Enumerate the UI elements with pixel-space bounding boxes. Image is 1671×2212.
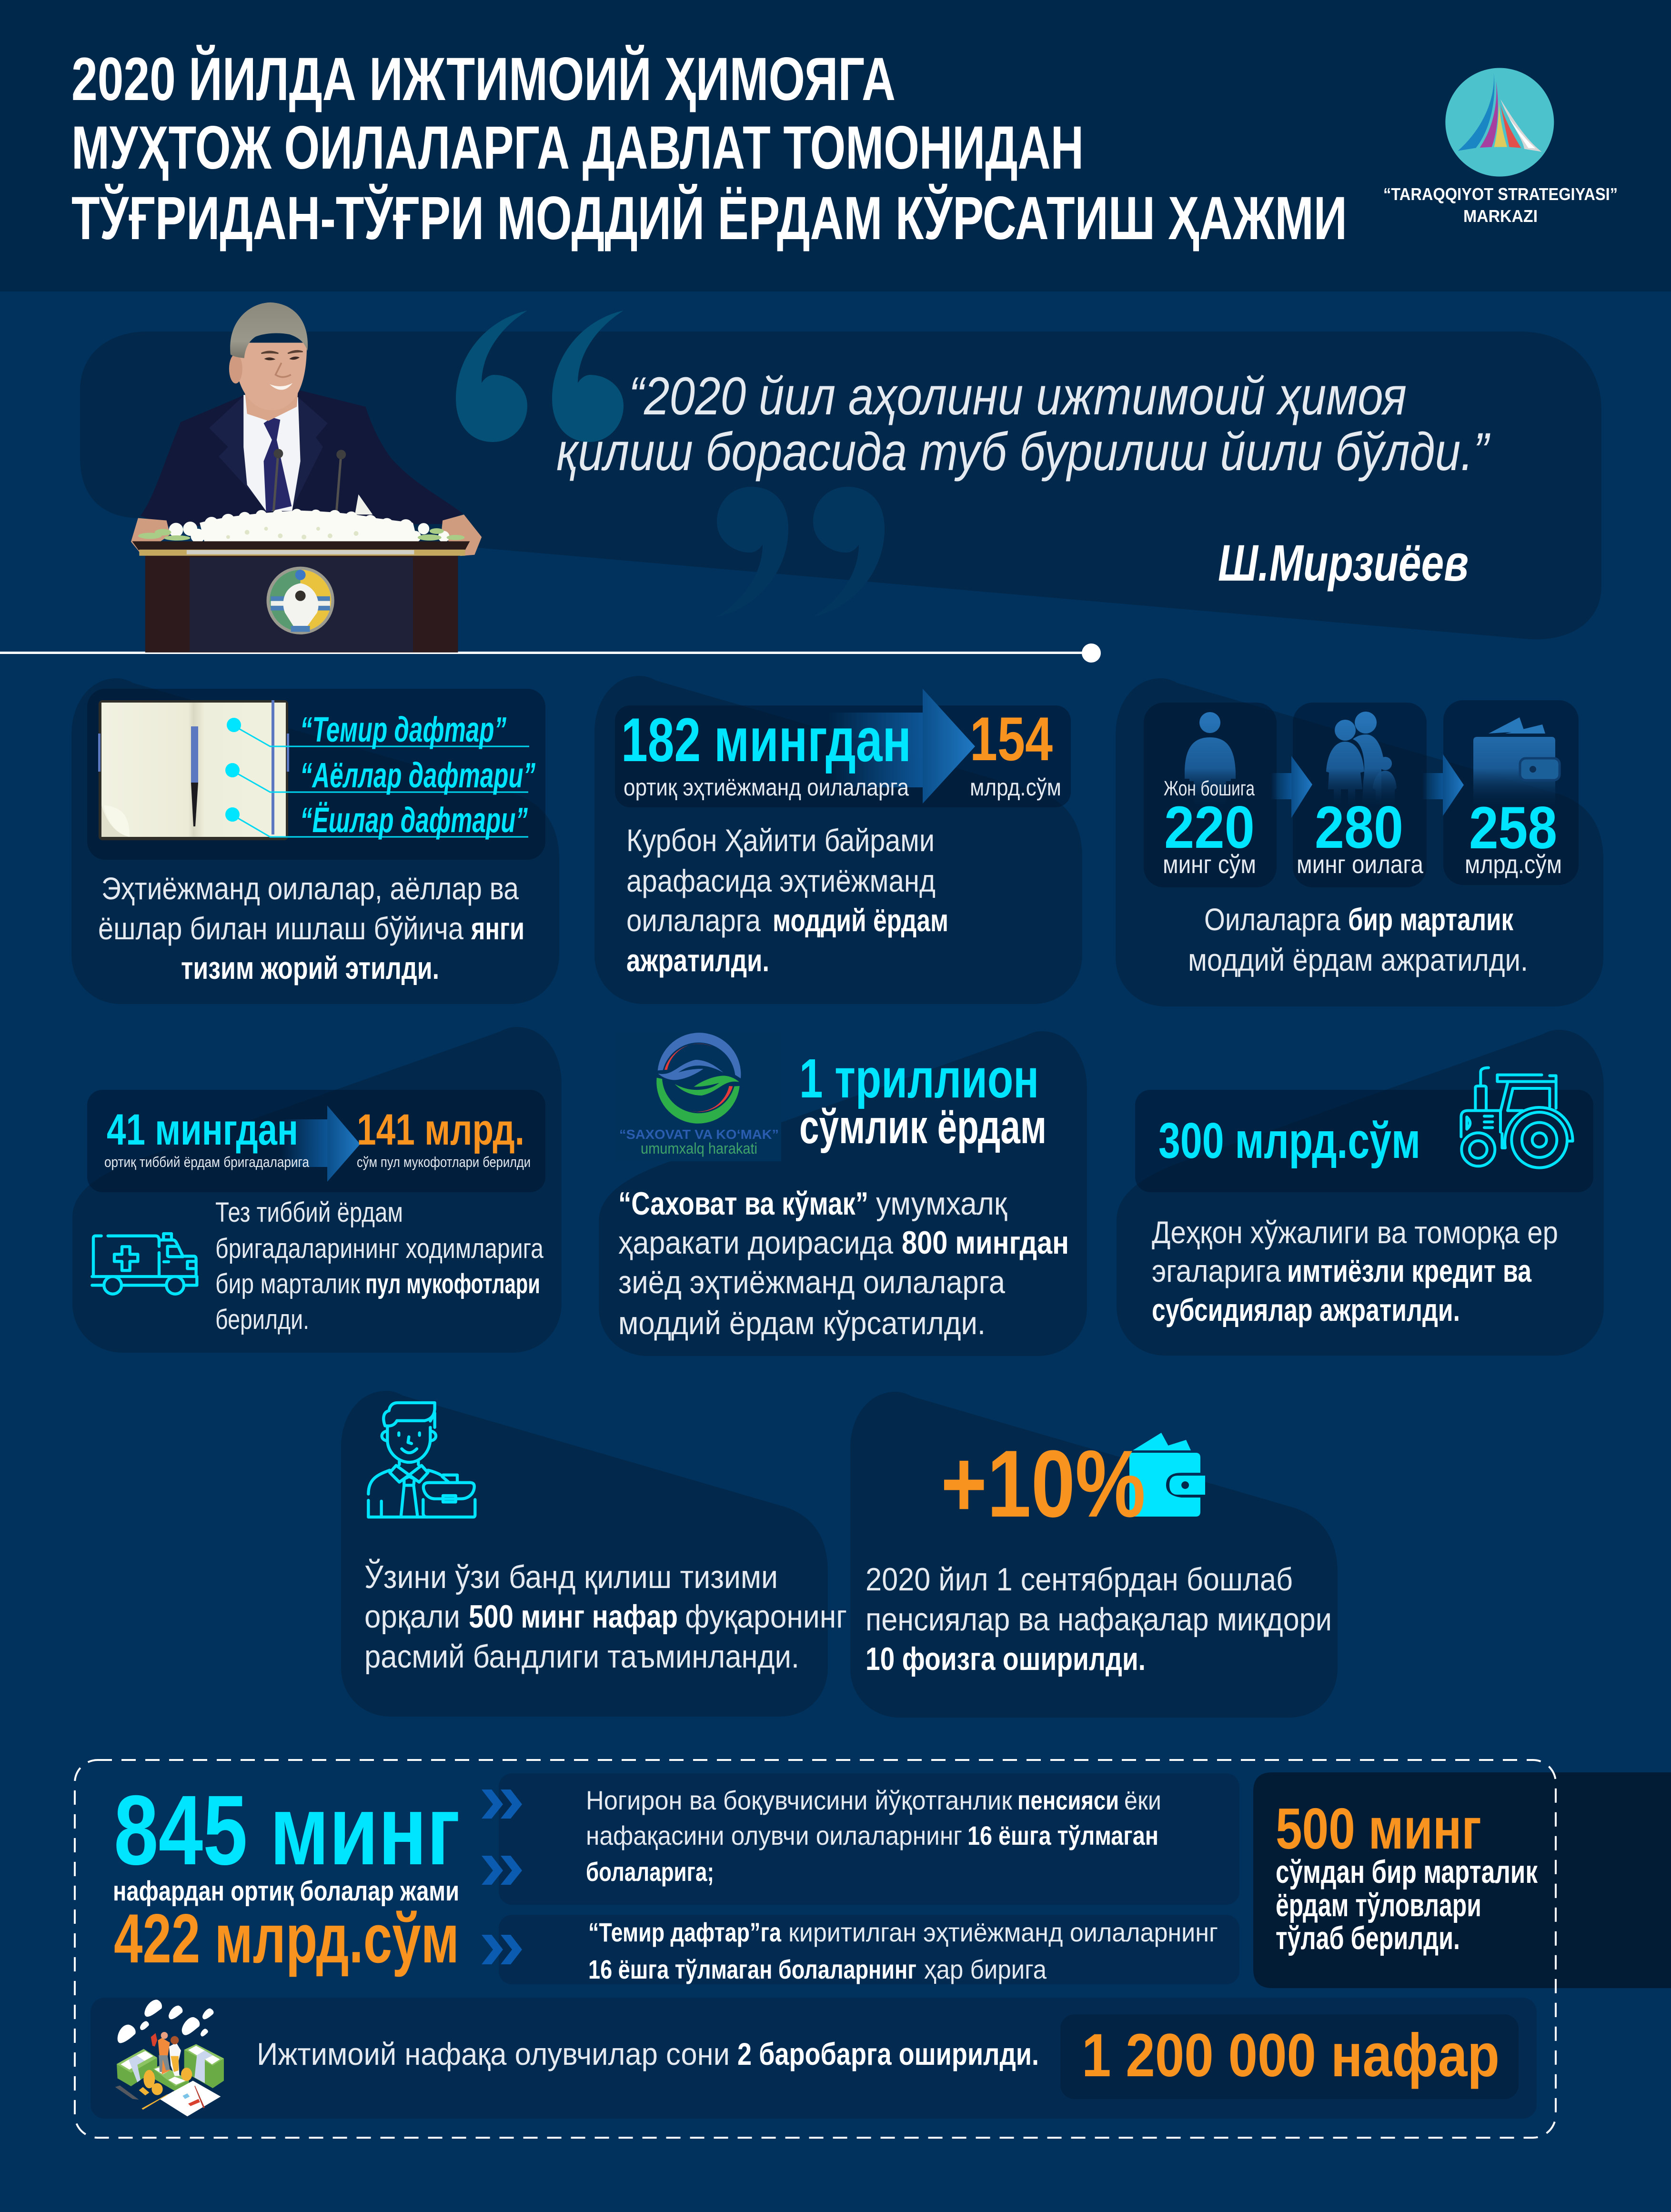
tie (264, 417, 292, 512)
panel text: фуқаронинг (685, 1599, 847, 1635)
panel: ambulance brigades (72, 1027, 562, 1353)
panel: one-time aid (1116, 678, 1603, 1006)
icon: ambulance (92, 1234, 197, 1294)
panel: Qurbon Hayit aid (594, 676, 1082, 1004)
figure: +10% (941, 1431, 1146, 1537)
box: 500 thousand payment (1253, 1772, 1671, 1988)
box: social benefit recipients (91, 1998, 1537, 2119)
box: 500 thousand payment: 500 минг (1276, 1796, 1481, 1861)
panel text: ёшлар билан ишлаш бўйича (98, 911, 463, 946)
quote text: “2020 йил аҳолини ижтимоий ҳимоя (629, 366, 1407, 426)
notebook labels: “Ёшлар дафтари” (300, 800, 528, 840)
panel text: орқали (364, 1599, 460, 1635)
panel text: умумхалқ (876, 1186, 1007, 1222)
box: 500 thousand payment: тўлаб берилди. (1276, 1920, 1460, 1956)
arrow (829, 689, 975, 804)
box: iron notebook: “Темир дафтар”га (588, 1917, 782, 1947)
box: pensions (499, 1773, 1239, 1905)
figures: Жон бошига (1164, 777, 1255, 800)
panel text: расмий бандлиги таъминланди. (364, 1639, 799, 1675)
icon: Saxovat logo: “SAXOVAT VA KO‘MAK” (619, 1127, 779, 1142)
panel: self-employment (341, 1391, 847, 1717)
icon: person (1185, 712, 1236, 807)
panel text: субсидиялар ажратилди. (1152, 1292, 1460, 1327)
speaker at podium illustration (131, 302, 482, 653)
podium (145, 555, 458, 653)
icon: tractor (1461, 1068, 1573, 1168)
panel text (626, 823, 948, 978)
main figures: 845 минг (114, 1775, 460, 1886)
panel text (1152, 1215, 1558, 1327)
panel text: 500 минг нафар (469, 1599, 678, 1635)
arrows (1271, 754, 1464, 818)
panel text (866, 1561, 1332, 1677)
lapels (209, 396, 328, 509)
illustration: family and money (115, 2000, 224, 2116)
panel text: ҳаракати доирасида (618, 1225, 893, 1261)
figures (1163, 777, 1562, 879)
benefit text (257, 2036, 1039, 2071)
title (71, 45, 1347, 252)
figures: сўм пул мукофотлари берилди (357, 1154, 531, 1170)
figures: 258 (1469, 795, 1557, 861)
box: iron notebook: киритилган эҳтиёжманд оилаларнинг (788, 1917, 1218, 1947)
notebook labels: “Темир дафтар” (300, 710, 506, 749)
panel text: бир марталик (1348, 902, 1514, 937)
neck and head (245, 390, 298, 421)
header band (0, 0, 1671, 292)
figures: сўмлик ёрдам (799, 1100, 1047, 1154)
box: 500 thousand payment: сўмдан бир марталик (1276, 1854, 1538, 1890)
panel text: 800 мингдан (902, 1225, 1069, 1261)
main figures: нафардан ортиқ болалар жами (113, 1876, 459, 1907)
notebook labels: “Аёллар дафтари” (300, 755, 535, 795)
figures (799, 1047, 1047, 1154)
icon: family (1326, 712, 1397, 807)
figures: 41 мингдан (107, 1106, 298, 1154)
panel: Saxovat va ko'mak (599, 1031, 1087, 1356)
title: МУҲТОЖ ОИЛАЛАРГА ДАВЛАТ ТОМОНИДАН (71, 114, 1084, 182)
panel text: моддий ёрдам ажратилди. (1188, 942, 1528, 977)
logo caption: “TARAQQIYOT STRATEGIYASI” (1383, 184, 1618, 204)
benefit text: 2 баробарга оширилди. (737, 2036, 1039, 2071)
panel text: “Саховат ва кўмак” (618, 1186, 868, 1222)
icon: Saxovat logo: umumxalq harakati (641, 1140, 757, 1157)
panel text: моддий ёрдам кўрсатилди. (618, 1305, 986, 1341)
box: iron notebook: ҳар бирига (924, 1954, 1047, 1984)
figures: 154 (970, 704, 1053, 774)
figures: минг оилага (1297, 850, 1424, 879)
hands (131, 518, 170, 555)
panel text (618, 1186, 1069, 1341)
microphones (273, 456, 341, 512)
box: iron notebook: 16 ёшга тўлмаган болаларнинг (588, 1954, 916, 1984)
white gap (355, 494, 372, 514)
figures (104, 1106, 531, 1170)
panel text (215, 1197, 544, 1335)
panel text (98, 871, 524, 985)
state emblem (266, 567, 334, 634)
panel text: ажратилди. (626, 943, 769, 978)
figures: млрд.сўм (970, 774, 1061, 801)
icon: chevrons (482, 1790, 522, 1964)
panel: notebooks (71, 678, 559, 1004)
box: iron notebook (499, 1915, 1239, 1984)
panel text: эгаларига (1152, 1253, 1281, 1288)
quote text (556, 366, 1490, 482)
figures: ортиқ тиббий ёрдам бригадаларига (104, 1154, 310, 1170)
benefit text: Ижтимоий нафақа олувчилар сони (257, 2036, 730, 2071)
icon: strategy centre logo (1445, 68, 1554, 177)
box: pensions: ёки (1124, 1785, 1161, 1815)
box: 500 thousand payment: ёрдам тўловлари (1276, 1887, 1481, 1923)
main figures (113, 1775, 460, 1977)
box: pensions: нафақасини олувчи оилаларнинг (586, 1820, 962, 1850)
icon: Saxovat logo (616, 1033, 781, 1161)
panel text: пул мукофотлари (365, 1268, 540, 1299)
box: pensions: 16 ёшга тўлмаган (967, 1820, 1158, 1850)
figures: ортиқ эҳтиёжманд оилаларга (624, 774, 909, 801)
icon: open notebook (98, 700, 289, 840)
panel text: моддий ёрдам (773, 903, 948, 938)
suit (141, 390, 463, 526)
arrow (281, 1106, 360, 1182)
flowers (169, 509, 450, 543)
panel text (1188, 902, 1528, 977)
panel: farmers credit (1117, 1030, 1604, 1356)
icon: wallet (1129, 1433, 1205, 1517)
face features (262, 351, 303, 353)
figures: 220 (1164, 794, 1255, 861)
dashed frame (75, 1760, 1556, 2138)
notebook labels (300, 710, 535, 840)
panel text: Курбон Ҳайити байрами (626, 823, 935, 858)
figure: 300 млрд.сўм (1158, 1113, 1420, 1169)
panel: quote (80, 311, 1601, 639)
panel text: арафасида эҳтиёжманд (626, 863, 936, 898)
panel text: янги (471, 911, 524, 946)
panel text: пенсиялар ва нафақалар миқдори (866, 1601, 1332, 1638)
figures: 141 млрд. (357, 1106, 524, 1154)
figures: 1 триллион (799, 1047, 1039, 1109)
panel text: Оилаларга (1204, 902, 1340, 937)
logo caption (1383, 184, 1618, 226)
panel text: 2020 йил 1 сентябрдан бошлаб (866, 1561, 1293, 1598)
figures: 280 (1315, 794, 1403, 861)
panel text: имтиёзли кредит ва (1287, 1253, 1532, 1288)
panel text: зиёд эҳтиёжманд оилаларга (618, 1264, 1005, 1300)
notebook markers (225, 718, 529, 837)
divider with end dot (0, 643, 1101, 663)
icon: employee with briefcase (368, 1403, 475, 1517)
panel: pension increase (850, 1392, 1338, 1718)
figures (621, 704, 1061, 801)
panel text: бир марталик (215, 1268, 361, 1299)
title: 2020 ЙИЛДА ИЖТИМОИЙ ҲИМОЯГА (71, 45, 896, 113)
box: pensions: болаларига; (586, 1857, 714, 1887)
section: children payments (75, 1760, 1671, 2138)
panel text: тизим жорий этилди. (181, 950, 439, 985)
box: pensions: пенсияси (1017, 1785, 1119, 1815)
panel text (364, 1558, 847, 1675)
panel text: бригадаларининг ходимларига (215, 1233, 544, 1264)
panel text: Ўзини ўзи банд қилиш тизими (364, 1558, 778, 1595)
benefit figure: 1 200 000 нафар (1082, 2021, 1500, 2090)
panel text: оилаларга (626, 903, 761, 938)
quote author: Ш.Мирзиёев (1218, 534, 1469, 592)
panel text: Эҳтиёжманд оилалар, аёллар ва (101, 871, 519, 906)
figures: млрд.сўм (1465, 850, 1562, 879)
closing quote mark (717, 487, 885, 617)
figures: минг сўм (1163, 850, 1256, 879)
logo caption: MARKAZI (1463, 206, 1538, 226)
opening quote mark (456, 311, 624, 442)
panel text: берилди. (215, 1304, 309, 1335)
panel text: Тез тиббий ёрдам (215, 1197, 403, 1228)
quote text: қилиш борасида туб бурилиш йили бўлди.” (556, 422, 1490, 482)
panel text: Деҳқон хўжалиги ва томорқа ер (1152, 1215, 1558, 1250)
main figures: 422 млрд.сўм (114, 1900, 459, 1977)
panel text: 10 фоизга оширилди. (866, 1641, 1146, 1677)
box: pensions: Ногирон ва боқувчисини йўқотганлик (586, 1785, 1012, 1815)
figures: 182 мингдан (621, 705, 911, 774)
shirt and collar (243, 395, 301, 511)
icon: wallet (1473, 717, 1560, 807)
